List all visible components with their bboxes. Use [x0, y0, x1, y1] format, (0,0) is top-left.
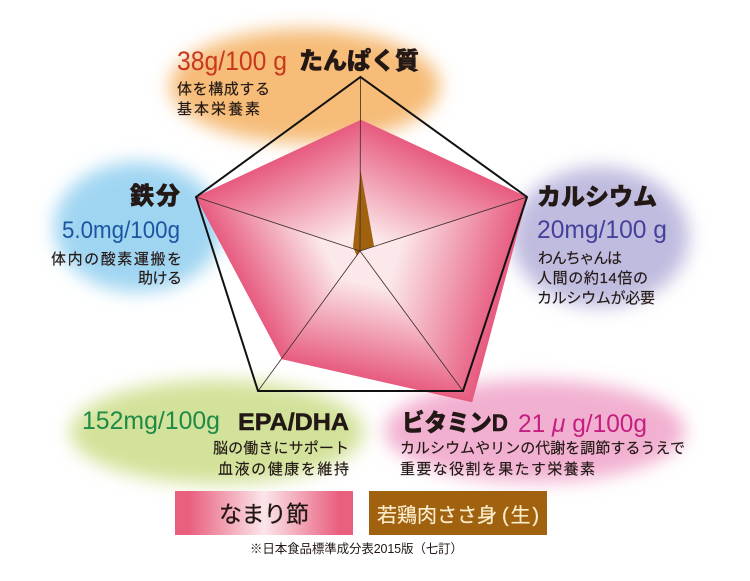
label: vitamin D: ビタミンD	[402, 409, 508, 437]
label: iron: 助ける	[138, 270, 182, 287]
label: vitamin D: 重要な役割を果たす栄養素	[400, 461, 595, 478]
label: protein: 体を構成する	[177, 81, 270, 98]
label: iron: 鉄分	[130, 182, 180, 210]
label: calcium: わんちゃんは	[538, 250, 622, 267]
label: calcium: カルシウムが必要	[537, 290, 655, 307]
label: protein: 基本栄養素	[177, 101, 260, 118]
blob: vitamin D background	[385, 380, 685, 482]
label: EPA/DHA: 152mg/100g	[82, 407, 220, 435]
blob: EPA/DHA background	[70, 380, 364, 484]
radar outline	[196, 77, 527, 391]
blob: iron background	[54, 162, 222, 292]
label: EPA/DHA	[82, 407, 349, 478]
source note: ※日本食品標準成分表2015版（七訂）	[250, 541, 463, 556]
label: protein: たんぱく質	[299, 48, 419, 75]
label: protein: 38g/100 g	[177, 46, 287, 76]
radar spokes	[196, 77, 527, 391]
label: EPA/DHA: EPA/DHA	[238, 409, 349, 436]
label: vitamin D: 21 μ g/100g	[518, 410, 647, 438]
legend: chicken breast: 若鶏肉ささ身	[377, 504, 497, 527]
label: calcium	[537, 184, 667, 307]
label: EPA/DHA: 脳の働きにサポート	[213, 440, 349, 457]
label: EPA/DHA: 血液の健康を維持	[218, 461, 349, 478]
label: calcium: 人間の約14倍の	[537, 270, 648, 287]
blob: protein background	[170, 29, 440, 143]
label: iron: 体内の酸素運搬を	[51, 251, 182, 268]
label: calcium: カルシウム	[537, 184, 657, 211]
label: protein	[177, 46, 419, 118]
label: vitamin D	[400, 409, 685, 478]
radar series: namaribushi	[196, 120, 527, 402]
label: iron	[51, 182, 182, 287]
legend: namaribushi	[175, 491, 353, 535]
label: calcium: 20mg/100 g	[537, 216, 667, 244]
legend: namaribushi: なまり節	[219, 501, 309, 527]
legend: chicken breast: (生)	[502, 504, 539, 527]
radar series: chicken breast	[353, 171, 374, 256]
legend: chicken breast	[369, 491, 547, 535]
label: vitamin D: カルシウムやリンの代謝を調節するうえで	[400, 440, 685, 457]
label: iron: 5.0mg/100g	[62, 217, 180, 244]
blob: calcium background	[511, 167, 689, 307]
